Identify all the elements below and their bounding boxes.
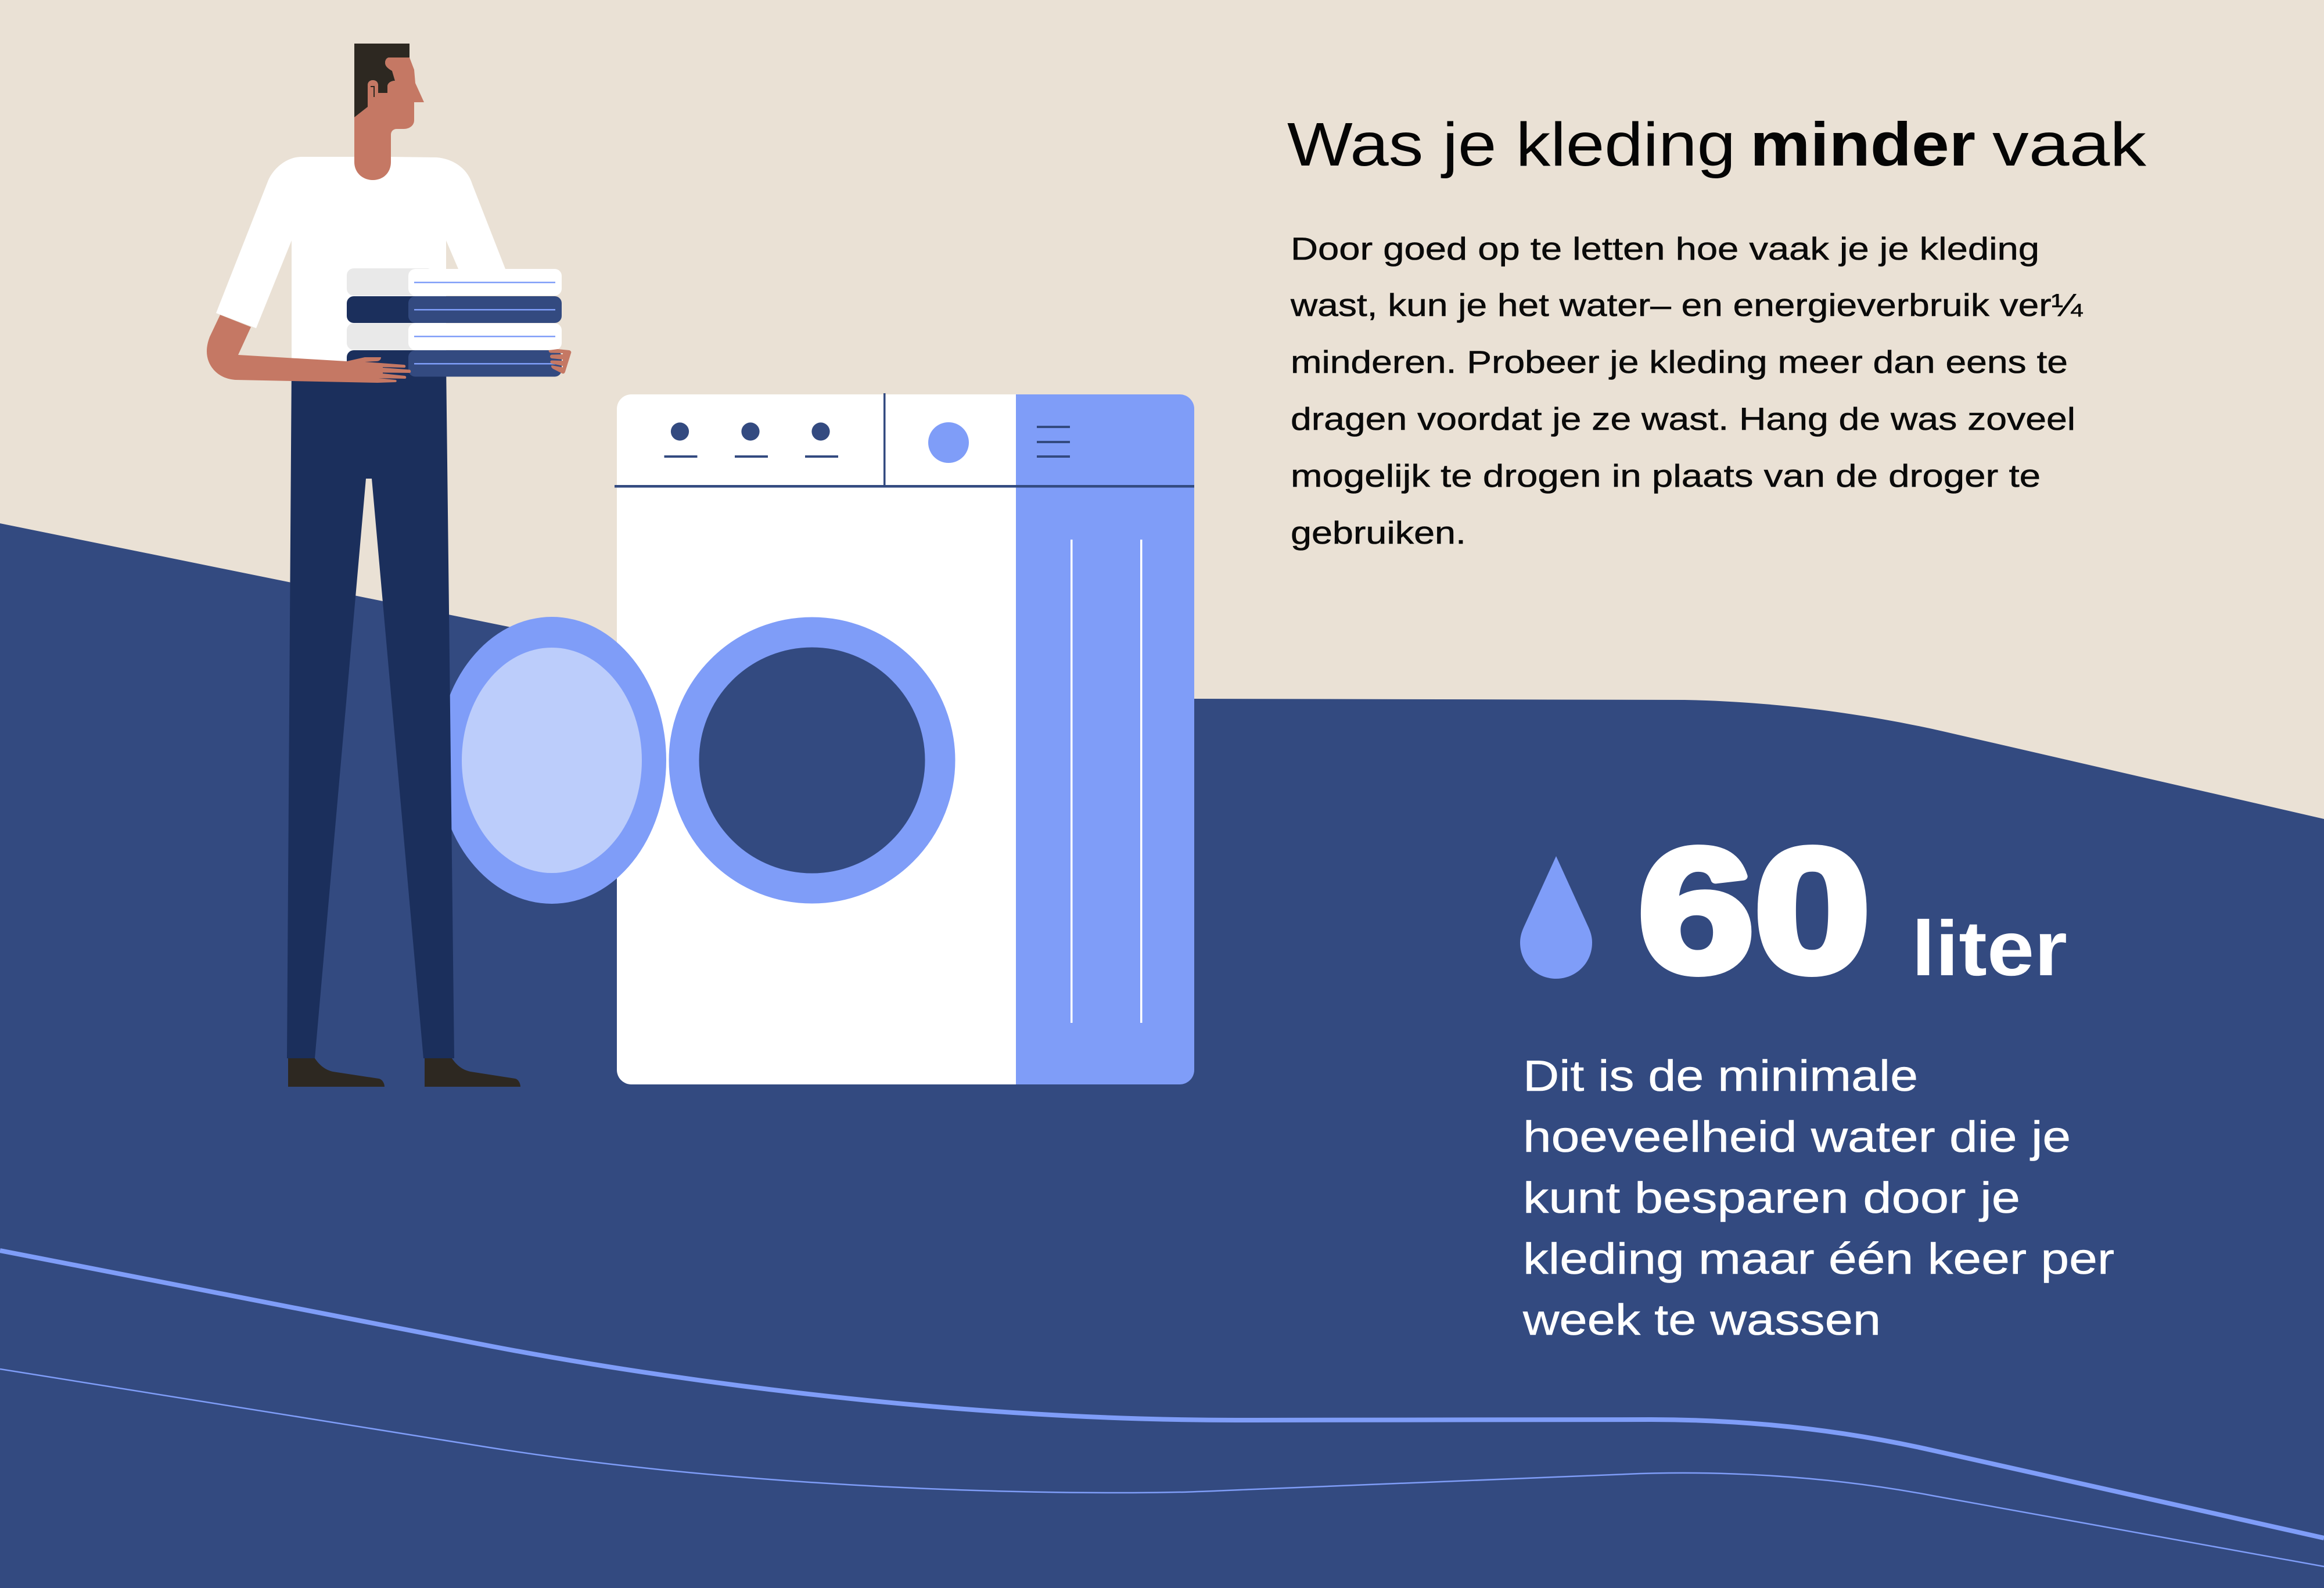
man carrying laundry <box>207 44 571 1087</box>
towel 4 <box>347 350 562 376</box>
thick wave line <box>0 1251 2324 1538</box>
statistic description: week te wassen <box>1522 1295 1881 1344</box>
side panel white lines <box>1071 540 1142 1023</box>
white shirt <box>216 157 505 372</box>
control panel lines <box>615 393 1194 488</box>
statistic description <box>1522 1051 2114 1344</box>
unit: liter: liter <box>1912 906 2067 992</box>
title <box>1287 110 2147 179</box>
towel 3 <box>347 323 562 350</box>
statistic description: Dit is de minimale <box>1523 1051 1918 1100</box>
trousers <box>287 363 454 1058</box>
navy ground shape <box>0 523 2324 1588</box>
statistic description: hoeveelheid water die je <box>1523 1112 2071 1161</box>
ear line <box>371 87 374 97</box>
towel 1 <box>347 268 562 296</box>
towel 2 <box>347 296 562 323</box>
statistic description: kleding maar één keer per <box>1523 1234 2114 1283</box>
arm and left hand <box>207 315 411 383</box>
body paragraph: gebruiken. <box>1291 515 1466 551</box>
right shoe <box>425 1058 520 1087</box>
machine body <box>617 394 1016 1084</box>
thin wave line <box>0 1369 2324 1567</box>
body paragraph: mogelijk te drogen in plaats van de droger te <box>1291 458 2041 494</box>
title: Was je kleding <box>1287 110 1736 179</box>
statistic: 60: 60 <box>1638 813 1870 1008</box>
drum opening <box>684 632 940 889</box>
control knobs <box>664 422 838 458</box>
menu lines <box>1037 426 1070 458</box>
title: minder <box>1750 110 1975 179</box>
power button <box>928 422 969 463</box>
hair <box>354 44 410 117</box>
body paragraph: minderen. Probeer je kleding meer dan eens te <box>1291 344 2068 380</box>
machine side panel <box>1016 394 1194 1084</box>
statistic description: kunt besparen door je <box>1523 1173 2020 1222</box>
body paragraph: wast, kun je het water– en energieverbruik ver¼ <box>1290 287 2083 323</box>
title: vaak <box>1992 110 2147 179</box>
open door <box>437 617 666 904</box>
washing machine <box>437 393 1194 1084</box>
icon: water drop <box>1520 856 1592 979</box>
body paragraph: Door goed op te letten hoe vaak je je kleding <box>1291 231 2039 267</box>
body paragraph: dragen voordat je ze wast. Hang de was zoveel <box>1291 401 2075 437</box>
neck and face <box>354 58 424 180</box>
left shoe <box>288 1058 385 1087</box>
body paragraph <box>1290 231 2083 551</box>
stack of clothes <box>347 268 562 376</box>
right hand <box>549 349 571 373</box>
